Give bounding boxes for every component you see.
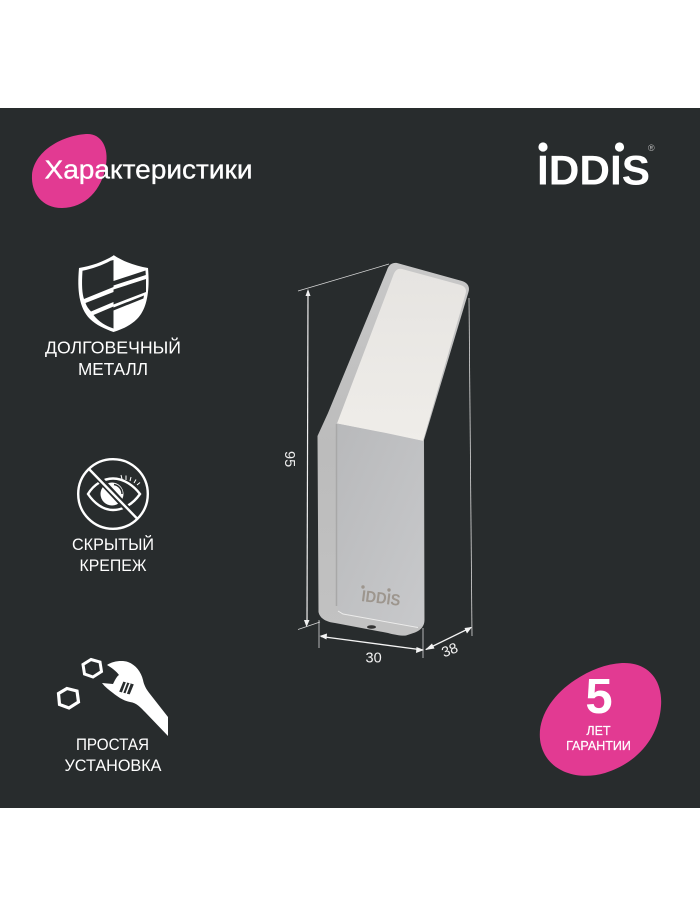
label: МЕТАЛЛ	[78, 359, 148, 379]
front bright bottom edge	[338, 611, 418, 628]
icon: wrench and nuts	[58, 660, 168, 736]
feature: easy installation	[58, 660, 168, 775]
number: 5	[585, 670, 613, 724]
label: КРЕПЕЖ	[80, 557, 147, 575]
warranty badge	[540, 663, 661, 776]
top face	[337, 269, 466, 441]
caption: ГАРАНТИИ	[566, 739, 631, 753]
caption: ЛЕТ	[586, 724, 611, 738]
width dimension: 30	[366, 650, 382, 666]
title: Характеристики	[44, 156, 252, 184]
icon: shield	[78, 255, 149, 332]
dark background panel	[0, 108, 700, 808]
depth dimension: 38	[440, 640, 460, 661]
iddis logo: IDDIS	[537, 146, 650, 194]
width dimension	[319, 620, 424, 666]
label: ДОЛГОВЕЧНЫЙ	[45, 336, 181, 358]
height dimension	[281, 264, 389, 630]
left groove	[336, 424, 338, 606]
hook side and body	[318, 263, 469, 636]
product: hook	[318, 263, 469, 636]
label: СКРЫТЫЙ	[72, 535, 154, 554]
screw hole	[367, 625, 376, 629]
hook logo: IDDIS	[361, 588, 402, 610]
heading with pink blob	[32, 134, 252, 208]
dimension lines	[281, 264, 472, 666]
icon: crossed eye	[78, 459, 148, 529]
feature: durable metal	[45, 255, 181, 379]
right reference line	[469, 298, 472, 636]
pink blob	[32, 134, 107, 208]
iddis logo: ®	[648, 143, 655, 153]
front face	[337, 424, 424, 627]
feature: hidden fastening	[72, 459, 154, 575]
label: ПРОСТАЯ	[76, 736, 149, 754]
pink blob	[540, 663, 661, 776]
label: УСТАНОВКА	[64, 757, 162, 775]
height dimension: 95	[281, 451, 297, 467]
depth dimension	[425, 627, 472, 661]
